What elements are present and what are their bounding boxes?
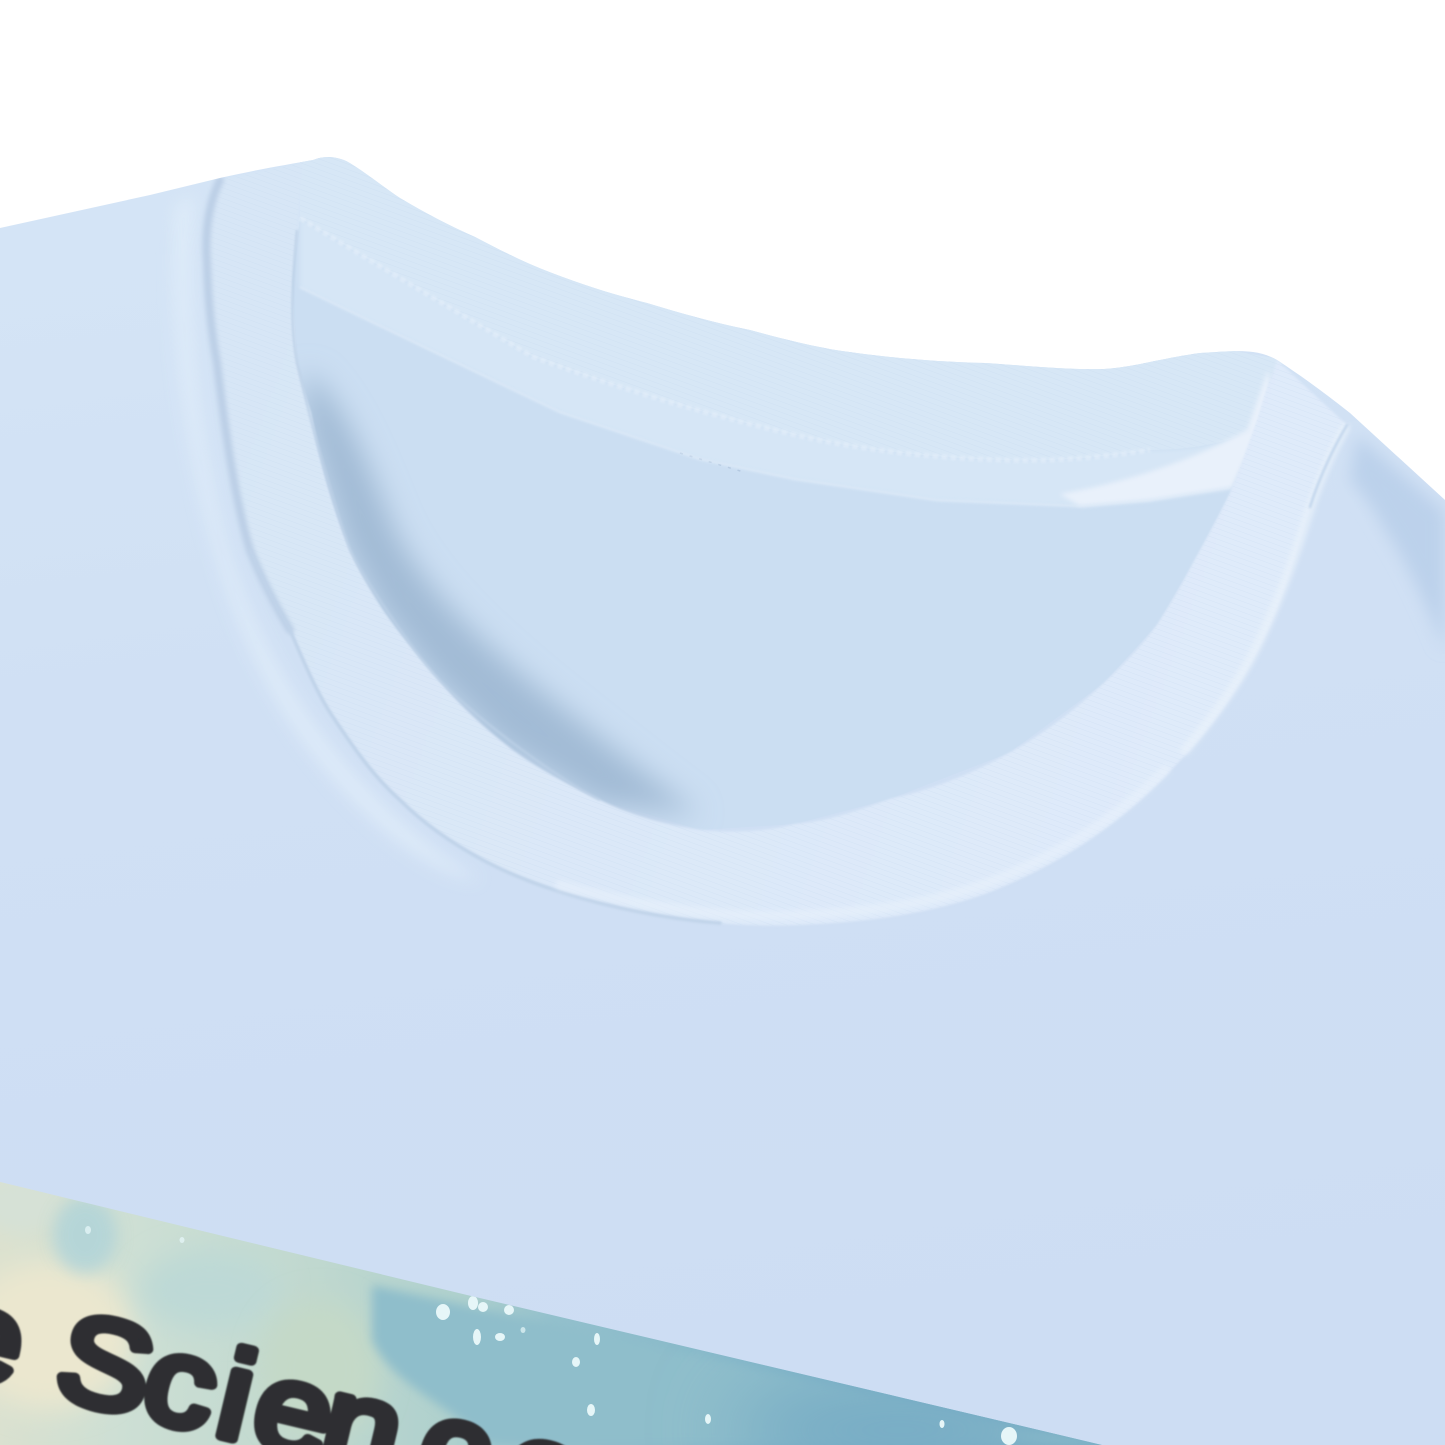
inner collar edge shadow <box>292 230 600 800</box>
watercolor blob: teal left <box>53 1197 117 1273</box>
print background <box>0 1170 1110 1445</box>
printed graphic on shirt <box>0 1170 1110 1445</box>
right shoulder shading <box>1350 442 1445 628</box>
neck tape <box>300 218 1247 506</box>
watercolor blob: pale aqua <box>142 1257 243 1322</box>
highlight outside left collar seam <box>182 241 441 861</box>
front collar band <box>283 364 1344 926</box>
watercolor wash: blue right region <box>372 1285 1110 1445</box>
right collar stitched strip <box>1185 428 1345 750</box>
inside back of the neck <box>295 274 370 338</box>
lower collar seam line <box>290 633 722 924</box>
white fold of neck tape at right <box>1060 370 1269 506</box>
watercolor blob: pale iridescent corner <box>0 1177 60 1233</box>
white paint specks <box>85 1226 1017 1445</box>
watercolor blob: deep blue right <box>730 1380 1070 1445</box>
back collar ribbing <box>300 157 1276 370</box>
watercolor blob: cream <box>0 1260 135 1410</box>
tape stitching <box>300 218 1150 461</box>
lower tape stitches <box>680 452 740 472</box>
watercolor blob: green <box>282 1326 374 1406</box>
neck interior shadow <box>305 370 700 815</box>
left collar seam stitching <box>206 180 290 630</box>
right seam shadow line <box>1310 425 1347 507</box>
collar bottom highlighted edge <box>560 770 1165 916</box>
tape lower crease <box>680 452 768 474</box>
